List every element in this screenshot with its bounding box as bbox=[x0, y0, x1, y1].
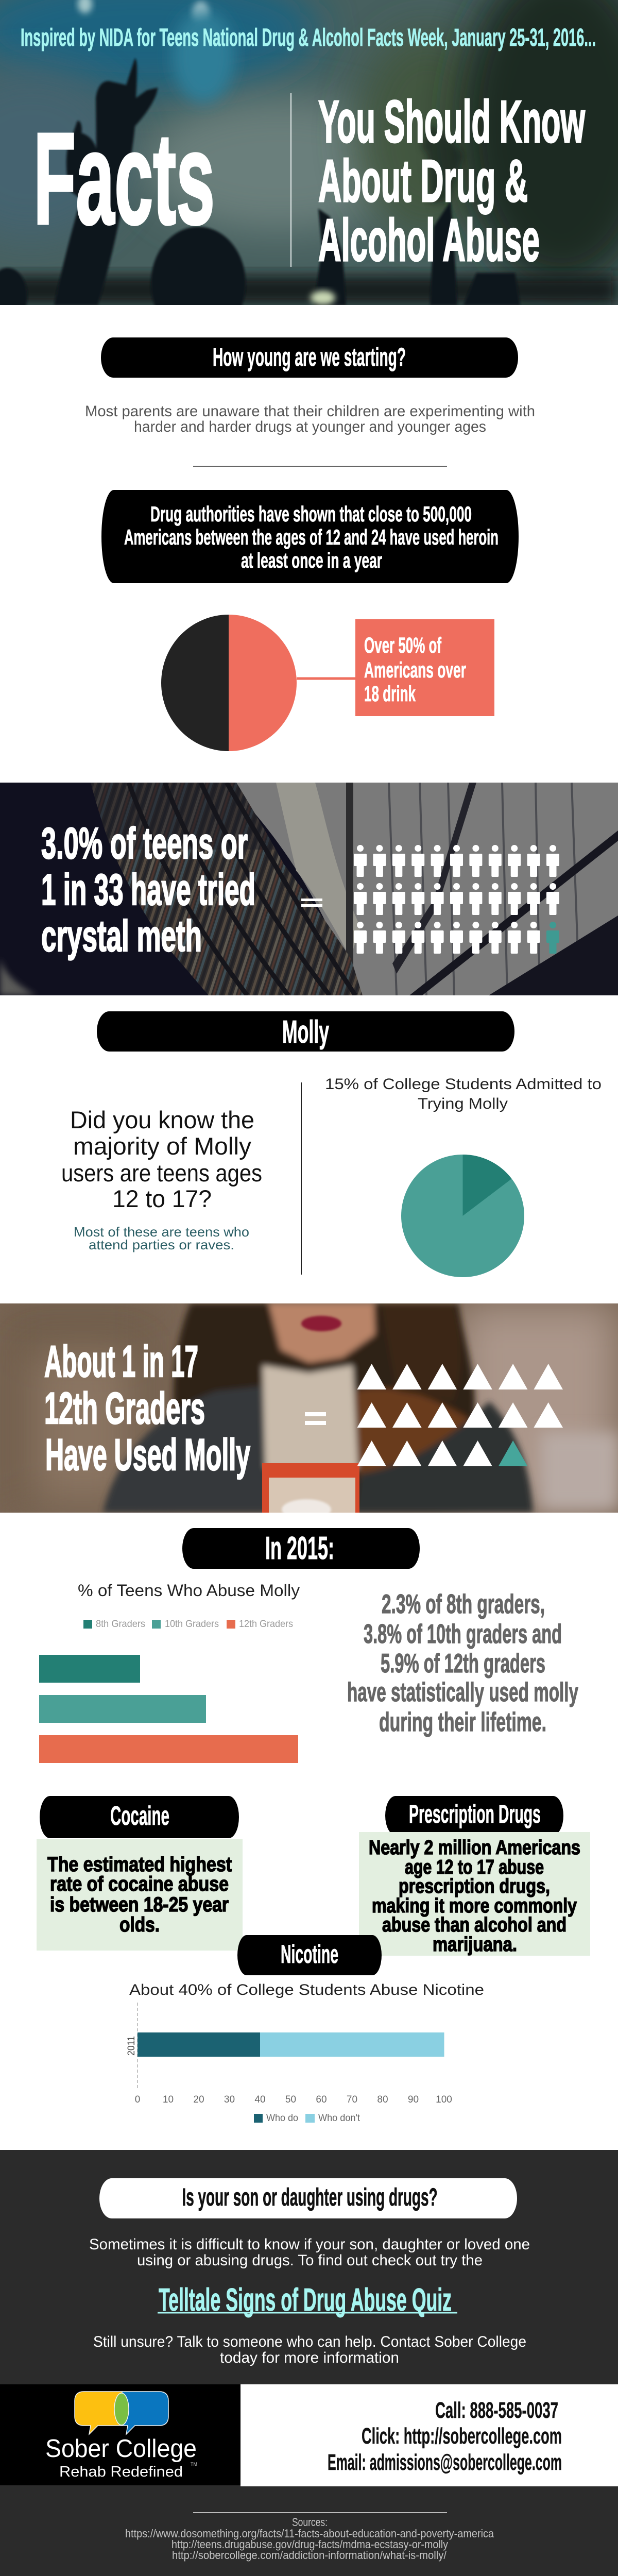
crowd silhouettes bbox=[0, 58, 521, 305]
prescription fact: prescription drugs, bbox=[399, 1875, 550, 1897]
heading pill: Molly bbox=[97, 1011, 514, 1052]
x axis ticks: 10 bbox=[163, 2094, 174, 2105]
contact panel bbox=[241, 2384, 618, 2486]
chart title: About 40% of College Students Abuse Nicotine bbox=[129, 1981, 484, 1998]
quiz link bbox=[158, 2282, 457, 2318]
text block: still unsure: Still unsure? Talk to someone who can help. Contact Sober College bbox=[93, 2333, 526, 2350]
equals sign bbox=[305, 1412, 326, 1425]
headline: 3.0 percent of teens bbox=[41, 819, 255, 961]
heading pill: How young are we starting bbox=[101, 337, 518, 378]
callout: Over 50 percent: Over 50% of bbox=[364, 633, 441, 658]
x axis ticks: 70 bbox=[347, 2094, 357, 2105]
x axis ticks: 0 bbox=[135, 2094, 140, 2105]
text block: sources: http://sobercollege.com/addiction-information/what-is-molly/ bbox=[172, 2549, 447, 2562]
heading pill: Molly: Molly bbox=[282, 1014, 329, 1050]
x axis ticks: 80 bbox=[377, 2094, 388, 2105]
callout pill: heroin statistic bbox=[101, 490, 519, 583]
pie chart: over 50 percent drink bbox=[161, 615, 494, 751]
text block: sometimes it is difficult: Sometimes it is difficult to know if your son, daughter or loved one bbox=[89, 2236, 530, 2253]
heading pill: prescription drugs bbox=[385, 1796, 563, 1835]
text block: still unsure: today for more information bbox=[220, 2349, 399, 2366]
stacked bar chart: nicotine bbox=[126, 1981, 484, 2124]
x axis ticks: 30 bbox=[224, 2094, 235, 2105]
heading pill: In 2015 bbox=[182, 1528, 420, 1569]
headline: about 1 in 17: Have Used Molly bbox=[45, 1430, 250, 1480]
headline: 3.0 percent of teens: crystal meth bbox=[41, 912, 202, 961]
prescription fact bbox=[369, 1837, 580, 1956]
heading pill: nicotine bbox=[237, 1935, 382, 1975]
title divider bbox=[290, 93, 291, 267]
panel: cocaine bbox=[37, 1796, 243, 1951]
x axis ticks: 90 bbox=[408, 2094, 419, 2105]
chart legend: 10th Graders bbox=[165, 1618, 219, 1630]
title: Facts: Facts bbox=[33, 106, 215, 251]
logo: Sober College: TM bbox=[191, 2462, 197, 2467]
heading pill: How young are we starting: How young are we starting? bbox=[213, 343, 406, 371]
callout pill: heroin statistic: at least once in a year bbox=[241, 548, 382, 572]
text block: sources bbox=[125, 2516, 494, 2562]
chart title: % of Teens Who Abuse Molly bbox=[78, 1581, 300, 1600]
x axis ticks: 60 bbox=[316, 2094, 327, 2105]
text block: parties or raves: Most of these are teens who bbox=[74, 1224, 249, 1240]
cocaine fact: is between 18-25 year bbox=[50, 1893, 229, 1916]
panel: crystal meth banner bbox=[0, 783, 618, 995]
text block: did you know: Did you know the bbox=[70, 1106, 254, 1133]
heading pill: is your son or daughter using drugs bbox=[99, 2178, 517, 2218]
text block: parents unaware: harder and harder drugs at younger and younger ages bbox=[134, 418, 486, 435]
headline: about 1 in 17 bbox=[44, 1337, 250, 1480]
heading pill: is your son or daughter using drugs: Is your son or daughter using drugs? bbox=[182, 2184, 438, 2211]
text block: sometimes it is difficult: using or abusing drugs. To find out check out try the bbox=[137, 2252, 483, 2269]
cocaine text box bbox=[37, 1839, 243, 1951]
x axis ticks: 20 bbox=[193, 2094, 204, 2105]
text block: parties or raves: attend parties or raves. bbox=[89, 1237, 234, 1252]
chart legend bbox=[83, 1618, 293, 1630]
headline: 3.0 percent of teens: 1 in 33 have tried bbox=[41, 866, 255, 914]
x axis ticks: 50 bbox=[285, 2094, 296, 2105]
heading pill: cocaine: Cocaine bbox=[110, 1801, 169, 1831]
cocaine fact: The estimated highest bbox=[47, 1853, 232, 1876]
chart title: Trying Molly bbox=[418, 1095, 508, 1112]
heading pill: In 2015: In 2015: bbox=[265, 1531, 334, 1566]
cocaine fact: olds. bbox=[119, 1913, 160, 1936]
prescription fact: making it more commonly bbox=[372, 1895, 577, 1917]
chart legend: 12th Graders bbox=[239, 1618, 293, 1630]
cocaine fact: rate of cocaine abuse bbox=[50, 1873, 229, 1895]
prescription fact: age 12 to 17 abuse bbox=[405, 1856, 544, 1878]
woman photo bbox=[0, 1303, 618, 1520]
x axis ticks bbox=[135, 2094, 452, 2105]
text block: sources: Sources: bbox=[292, 2516, 328, 2529]
text block: graders statistics bbox=[347, 1589, 578, 1737]
y axis label: 2011 bbox=[126, 2036, 137, 2056]
callout: Over 50 percent bbox=[355, 619, 494, 716]
headline: 3.0 percent of teens: 3.0% of teens or bbox=[41, 819, 248, 868]
x axis ticks: 100 bbox=[436, 2094, 452, 2105]
text block: parents unaware bbox=[85, 403, 535, 435]
heading pill: nicotine: Nicotine bbox=[281, 1940, 338, 1969]
text block: sources: http://teens.drugabuse.gov/drug-facts/mdma-ecstasy-or-molly bbox=[171, 2538, 448, 2551]
text block: did you know: 12 to 17? bbox=[112, 1185, 212, 1212]
header photo: concert crowd bbox=[0, 0, 618, 305]
headline: about 1 in 17: About 1 in 17 bbox=[44, 1337, 198, 1386]
callout: Over 50 percent: 18 drink bbox=[364, 682, 416, 706]
callout: Over 50 percent: Americans over bbox=[364, 658, 466, 683]
pictogram: triangles bbox=[357, 1364, 563, 1466]
chart legend: Who don't bbox=[318, 2113, 360, 2124]
panel: header bbox=[0, 0, 618, 305]
icon: speech bubbles bbox=[75, 2392, 168, 2434]
chart title bbox=[325, 1076, 602, 1112]
chart legend bbox=[254, 2113, 360, 2124]
library photo bbox=[0, 783, 618, 995]
title: You Should Know About Drug and Alcohol Abuse bbox=[318, 98, 586, 262]
text block: sometimes it is difficult bbox=[89, 2236, 530, 2269]
chart legend: Who do bbox=[266, 2113, 298, 2124]
text block: did you know: users are teens ages bbox=[61, 1159, 262, 1187]
prescription fact: marijuana. bbox=[433, 1934, 517, 1956]
text block: still unsure bbox=[93, 2333, 526, 2366]
bar chart: teens who abuse molly bbox=[39, 1581, 300, 1763]
heading pill: cocaine bbox=[40, 1796, 239, 1838]
headline: about 1 in 17: 12th Graders bbox=[44, 1384, 205, 1433]
text block: did you know: majority of Molly bbox=[73, 1132, 252, 1160]
chart legend: 8th Graders bbox=[96, 1618, 145, 1630]
text block: parents unaware: Most parents are unaware that their children are experimenting with bbox=[85, 403, 535, 420]
logo: Sober College bbox=[0, 2384, 241, 2485]
panel: prescription drugs bbox=[359, 1796, 590, 1956]
prescription text box bbox=[359, 1832, 590, 1956]
equals sign bbox=[301, 899, 322, 907]
pictogram: 1 in 33 people bbox=[354, 845, 559, 954]
prescription fact: abuse than alcohol and bbox=[382, 1914, 566, 1936]
panel: molly banner bbox=[0, 1303, 618, 1520]
panel: footer bbox=[0, 2150, 618, 2576]
logo: Sober College: Rehab Redefined bbox=[59, 2464, 183, 2480]
pie chart: 15 percent tried Molly bbox=[325, 1076, 602, 1277]
chart title: 15% of College Students Admitted to bbox=[325, 1076, 602, 1093]
text block: parties or raves bbox=[74, 1224, 249, 1252]
cocaine fact bbox=[47, 1853, 232, 1936]
text block: did you know bbox=[61, 1106, 262, 1212]
prescription fact: Nearly 2 million Americans bbox=[369, 1837, 580, 1859]
logo: Sober College: Sober College bbox=[45, 2435, 197, 2463]
x axis ticks: 40 bbox=[254, 2094, 266, 2105]
text block: sources: https://www.dosomething.org/facts/11-facts-about-education-and-poverty-america bbox=[125, 2527, 494, 2540]
